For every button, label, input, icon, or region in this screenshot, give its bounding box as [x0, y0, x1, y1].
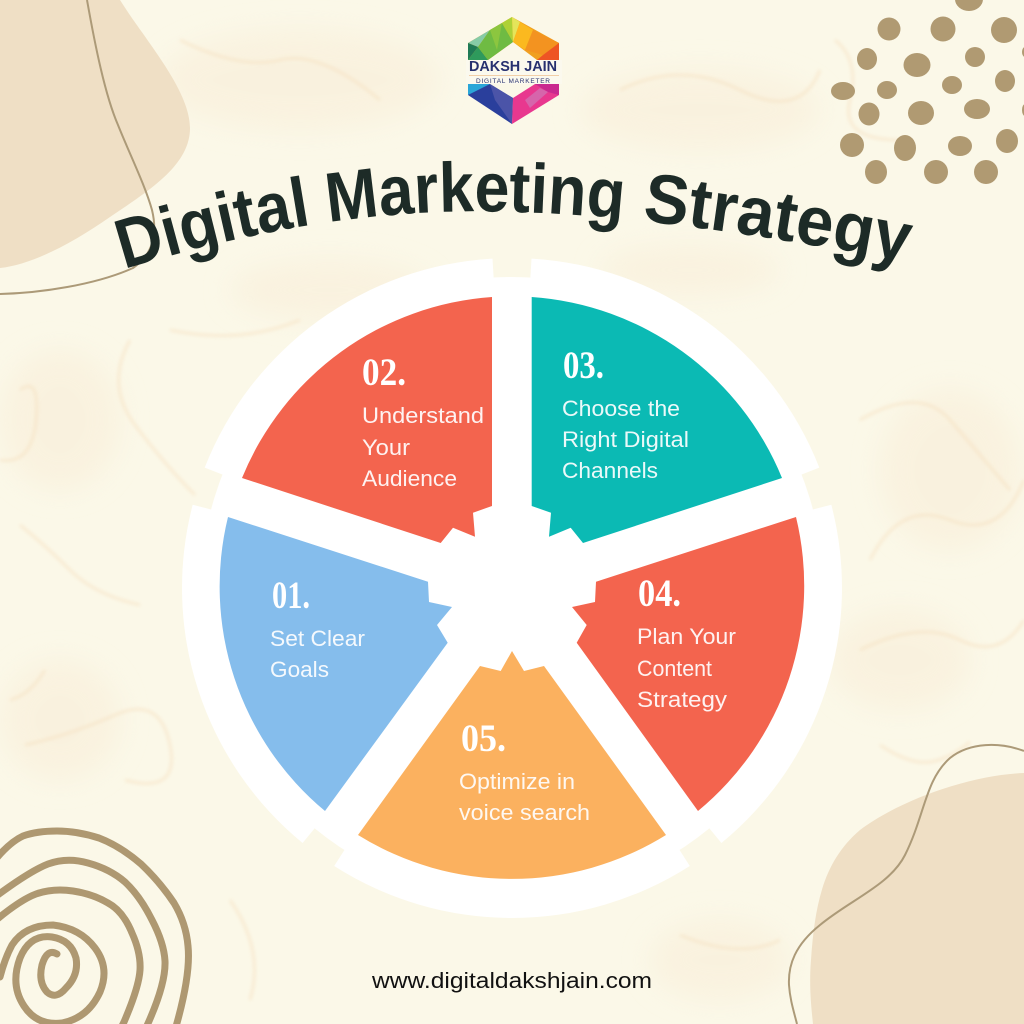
logo: Daksh Jain hexagon	[466, 17, 562, 124]
number 02: 02.	[362, 351, 406, 394]
number 04: 04.	[638, 572, 681, 615]
curved line: top-left	[0, 0, 154, 294]
segment 05: optimize in voice search	[358, 651, 666, 879]
number 03: 03.	[563, 344, 604, 387]
footer: website: www.digitaldakshjain.com	[371, 968, 652, 993]
text: plan your content strategy: Plan Your	[637, 624, 736, 649]
logo wordmark: DAKSH JAIN	[469, 58, 557, 75]
title: curved heading: Strategy	[646, 174, 914, 272]
blob: bottom-right tan shape	[810, 773, 1024, 1024]
logo tagline: DIGITAL MARKETER	[476, 78, 550, 85]
text: optimize in voice search: voice search	[459, 800, 590, 825]
segment 01: set clear goals	[220, 517, 452, 811]
text: set clear goals: Goals	[270, 657, 329, 682]
text: choose the right digital channels: Right Digital	[562, 427, 689, 452]
number 05: 05.	[461, 717, 506, 760]
decoration: polka dots	[831, 0, 1024, 184]
text: understand your audience: Understand	[362, 403, 484, 428]
segment 02: understand your audience	[242, 297, 492, 543]
text: understand your audience: Your	[362, 435, 410, 460]
text: choose the right digital channels: Choose the	[562, 396, 680, 421]
segment 03: choose the right digital channels	[532, 297, 782, 543]
text: optimize in voice search: Optimize in	[459, 769, 575, 794]
title: curved heading: Marketing	[326, 160, 622, 232]
wheel: white backing	[182, 259, 842, 918]
text: plan your content strategy: Content	[637, 656, 712, 681]
segment 04: plan your content strategy	[572, 517, 804, 811]
blob: top-left tan shape	[0, 0, 190, 268]
number 01: 01.	[272, 574, 310, 617]
curved line: bottom-right	[789, 745, 1024, 1024]
text: plan your content strategy: Strategy	[637, 687, 727, 712]
title: curved heading: Digital	[114, 176, 308, 268]
text: understand your audience: Audience	[362, 466, 457, 491]
text: set clear goals: Set Clear	[270, 626, 365, 651]
decoration: spiral	[0, 831, 188, 1024]
title: curved heading	[114, 160, 914, 272]
text: choose the right digital channels: Channels	[562, 458, 658, 483]
